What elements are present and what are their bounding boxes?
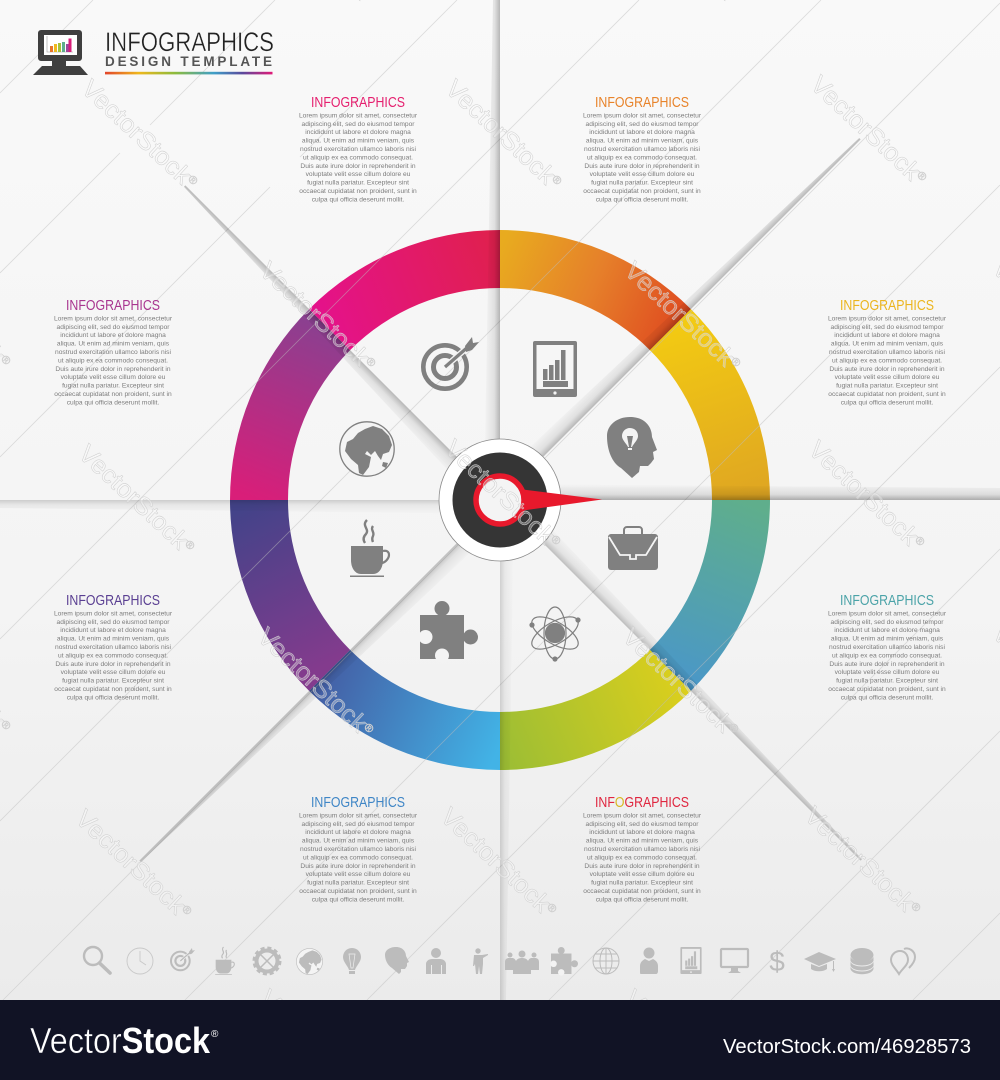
icon: head with lightbulb (607, 417, 657, 478)
icon: graduation cap (804, 952, 836, 972)
text block: left lower: culpa qui officia deserunt mollit. (67, 694, 159, 701)
text block: top left: ut aliquip ex ea commodo consequat. (303, 154, 413, 161)
text block: left lower: fugiat nulla pariatur. Excepteur sint (62, 678, 164, 685)
text block: bottom right: Lorem ipsum dolor sit amet, consectetur (583, 812, 702, 819)
text block: left upper: culpa qui officia deserunt mollit. (67, 399, 159, 406)
text block: top right: incididunt ut labore et dolore magna (589, 129, 695, 136)
text block: right lower: fugiat nulla pariatur. Excepteur sint (836, 678, 938, 685)
text block: left upper: aliqua. Ut enim ad minim veniam, quis (57, 341, 170, 348)
text block: right upper: incididunt ut labore et dolore magna (834, 332, 940, 339)
icon: map pins (891, 948, 915, 974)
text block: left lower: nostrud exercitation ullamco laboris nisi (55, 644, 171, 651)
text block: left upper: voluptate velit esse cillum dolore eu (61, 374, 166, 381)
watermarks: ® (544, 901, 559, 916)
bottom brand band: VectorStock.com/46928573 (723, 1036, 971, 1058)
text block: top right: Duis aute irure dolor in reprehenderit in (584, 163, 700, 170)
text block: left upper: occaecat cupidatat non proident, sunt in (54, 391, 172, 398)
icon: clock (127, 948, 153, 974)
text block: bottom right: ut aliquip ex ea commodo consequat. (587, 854, 697, 861)
text block: bottom right (583, 795, 702, 903)
text block: bottom right: INFOGRAPHICS (595, 795, 689, 811)
watermarks: VectorStock (803, 435, 919, 547)
icon: gear (254, 948, 280, 974)
text block: bottom left: aliqua. Ut enim ad minim veniam, quis (302, 838, 415, 845)
icon: person (640, 948, 658, 974)
watermarks: ® (914, 169, 929, 184)
text block: right upper: nostrud exercitation ullamco laboris nisi (829, 349, 945, 356)
icon: monitor (721, 949, 748, 973)
text block: bottom left: fugiat nulla pariatur. Excepteur sint (307, 880, 409, 887)
text block: bottom right: incididunt ut labore et dolore magna (589, 829, 695, 836)
watermarks: VectorStock (73, 439, 189, 551)
text block: top right: occaecat cupidatat non proident, sunt in (583, 188, 701, 195)
icon: team (505, 950, 539, 974)
watermarks: VectorStock (254, 256, 370, 368)
text block: top right: INFOGRAPHICS (595, 95, 689, 111)
icon: dollar: $ (769, 946, 785, 977)
text block: right upper: occaecat cupidatat non proident, sunt in (828, 391, 946, 398)
text block: right upper: culpa qui officia deserunt mollit. (841, 399, 933, 406)
watermarks: VectorStock (435, 802, 551, 914)
header: title (105, 27, 274, 74)
text block: left lower: Lorem ipsum dolor sit amet, consectetur (54, 610, 173, 617)
text block: right upper: Duis aute irure dolor in reprehenderit in (829, 366, 945, 373)
text block: bottom left: culpa qui officia deserunt mollit. (312, 896, 404, 903)
text block: right lower: Duis aute irure dolor in reprehenderit in (829, 661, 945, 668)
text block: top left: fugiat nulla pariatur. Excepteur sint (307, 180, 409, 187)
text block: right lower: voluptate velit esse cillum dolore eu (835, 669, 940, 676)
icon: businessman (426, 948, 446, 974)
text block: top right: voluptate velit esse cillum dolore eu (590, 171, 695, 178)
text block: top right: adipiscing elit, sed do eiusmod tempor (586, 121, 699, 128)
text block: right lower: adipiscing elit, sed do eiusmod tempor (831, 619, 944, 626)
icon: tablet chart (533, 341, 577, 397)
text block: bottom right: Duis aute irure dolor in reprehenderit in (584, 863, 700, 870)
icon: small target (171, 948, 195, 970)
text block: right lower: nostrud exercitation ullamco laboris nisi (829, 644, 945, 651)
watermarks: ® (182, 538, 197, 553)
watermarks: VectorStock (76, 74, 192, 186)
text block: bottom left (299, 795, 418, 903)
watermarks: VectorStock (252, 622, 368, 734)
bottom brand band (0, 1000, 1000, 1080)
text block: bottom left: incididunt ut labore et dolore magna (305, 829, 411, 836)
text block: right lower: occaecat cupidatat non proident, sunt in (828, 686, 946, 693)
text block: right upper: INFOGRAPHICS (840, 298, 934, 314)
text block: left upper: ut aliquip ex ea commodo consequat. (58, 357, 168, 364)
watermarks: VectorStock (70, 804, 186, 916)
watermarks: ® (728, 355, 743, 370)
center dial with red pointer (439, 434, 602, 561)
text block: top right: culpa qui officia deserunt mollit. (596, 196, 688, 203)
text block: bottom left: Duis aute irure dolor in reprehenderit in (300, 863, 416, 870)
bottom brand band: VectorStock (30, 1020, 211, 1061)
text block: top right: fugiat nulla pariatur. Excepteur sint (591, 180, 693, 187)
bottom icon row (84, 946, 915, 977)
text block: right lower: incididunt ut labore et dolore magna (834, 627, 940, 634)
text block: bottom left: occaecat cupidatat non proident, sunt in (299, 888, 417, 895)
watermarks: VectorStock (619, 256, 735, 368)
text block: left lower: voluptate velit esse cillum dolore eu (61, 669, 166, 676)
watermarks: ® (726, 721, 741, 736)
text block: left upper (54, 298, 173, 406)
text block: bottom right: fugiat nulla pariatur. Excepteur sint (591, 880, 693, 887)
header: computer logo icon (33, 30, 88, 75)
text block: left upper: Lorem ipsum dolor sit amet, consectetur (54, 315, 173, 322)
icon: bulb (343, 948, 361, 974)
watermarks: ® (549, 173, 564, 188)
text block: top left: voluptate velit esse cillum dolore eu (306, 171, 411, 178)
text block: right lower: aliqua. Ut enim ad minim veniam, quis (831, 636, 944, 643)
icon: coins (850, 948, 874, 974)
watermarks: ® (908, 900, 923, 915)
text block: top right: nostrud exercitation ullamco laboris nisi (584, 146, 700, 153)
watermarks: VectorStock (440, 74, 556, 186)
text block: top right (583, 95, 702, 203)
icon: puzzle piece (418, 601, 478, 662)
text block: right lower: ut aliquip ex ea commodo consequat. (832, 652, 942, 659)
text block: right upper: fugiat nulla pariatur. Excepteur sint (836, 383, 938, 390)
icon: coffee cup (350, 520, 389, 577)
icon: wire globe (593, 948, 619, 974)
text block: right lower: INFOGRAPHICS (840, 593, 934, 609)
watermarks: VectorStock (799, 801, 915, 913)
text block: left lower: adipiscing elit, sed do eiusmod tempor (57, 619, 170, 626)
text block: right lower (828, 593, 947, 701)
text block: top left: aliqua. Ut enim ad minim veniam, quis (302, 138, 415, 145)
text block: left upper: fugiat nulla pariatur. Excepteur sint (62, 383, 164, 390)
text block: bottom left: Lorem ipsum dolor sit amet, consectetur (299, 812, 418, 819)
text block: left upper: Duis aute irure dolor in reprehenderit in (55, 366, 171, 373)
text block: bottom right: adipiscing elit, sed do eiusmod tempor (586, 821, 699, 828)
text block: bottom right: occaecat cupidatat non proident, sunt in (583, 888, 701, 895)
text block: right upper: voluptate velit esse cillum dolore eu (835, 374, 940, 381)
icon: small head (385, 947, 409, 974)
text block: left lower: incididunt ut labore et dolore magna (60, 627, 166, 634)
text block: right lower: Lorem ipsum dolor sit amet, consectetur (828, 610, 947, 617)
text block: right upper: adipiscing elit, sed do eiusmod tempor (831, 324, 944, 331)
text block: right upper: aliqua. Ut enim ad minim veniam, quis (831, 341, 944, 348)
watermarks: ® (185, 173, 200, 188)
text block: top left: incididunt ut labore et dolore magna (305, 129, 411, 136)
text block: bottom left: voluptate velit esse cillum dolore eu (306, 871, 411, 878)
text block: left lower: ut aliquip ex ea commodo consequat. (58, 652, 168, 659)
text block: top left (299, 95, 418, 203)
text block: left lower: occaecat cupidatat non proident, sunt in (54, 686, 172, 693)
bottom brand band: ® (211, 1029, 219, 1040)
text block: right lower: culpa qui officia deserunt mollit. (841, 694, 933, 701)
watermarks: VectorStock (805, 70, 921, 182)
center dial with red pointer: ® (548, 533, 563, 548)
text block: right upper: ut aliquip ex ea commodo consequat. (832, 357, 942, 364)
text block: top left: INFOGRAPHICS (311, 95, 405, 111)
watermarks: ® (912, 534, 927, 549)
text block: left lower (54, 593, 173, 701)
text block: left upper: adipiscing elit, sed do eiusmod tempor (57, 324, 170, 331)
header: title: DESIGN TEMPLATE (105, 54, 272, 69)
icon: presenter (473, 948, 488, 974)
text block: left lower: Duis aute irure dolor in reprehenderit in (55, 661, 171, 668)
text block: left upper: INFOGRAPHICS (66, 298, 160, 314)
text block: bottom right: aliqua. Ut enim ad minim veniam, quis (586, 838, 699, 845)
text block: left upper: nostrud exercitation ullamco laboris nisi (55, 349, 171, 356)
text block: top right: aliqua. Ut enim ad minim veniam, quis (586, 138, 699, 145)
text block: bottom right: nostrud exercitation ullamco laboris nisi (584, 846, 700, 853)
text block: left upper: incididunt ut labore et dolore magna (60, 332, 166, 339)
icon: small globe (296, 948, 323, 975)
text block: top left: culpa qui officia deserunt mollit. (312, 196, 404, 203)
icon: magnifier (84, 947, 110, 973)
text block: top right: Lorem ipsum dolor sit amet, consectetur (583, 112, 702, 119)
text block: bottom left: nostrud exercitation ullamco laboris nisi (300, 846, 416, 853)
text block: top left: occaecat cupidatat non proident, sunt in (299, 188, 417, 195)
text block: right upper (828, 298, 947, 406)
text block: left lower: aliqua. Ut enim ad minim veniam, quis (57, 636, 170, 643)
text block: top left: nostrud exercitation ullamco laboris nisi (300, 146, 416, 153)
text block: top left: Duis aute irure dolor in reprehenderit in (300, 163, 416, 170)
icon: globe (340, 422, 394, 476)
text block: left lower: INFOGRAPHICS (66, 593, 160, 609)
text block: top left: adipiscing elit, sed do eiusmod tempor (302, 121, 415, 128)
icon: small tablet (680, 947, 702, 974)
text block: bottom left: INFOGRAPHICS (311, 795, 405, 811)
icon: target with arrow (423, 337, 479, 389)
text block: right upper: Lorem ipsum dolor sit amet, consectetur (828, 315, 947, 322)
text block: bottom left: ut aliquip ex ea commodo consequat. (303, 854, 413, 861)
text block: bottom right: culpa qui officia deserunt mollit. (596, 896, 688, 903)
header: title: INFOGRAPHICS (105, 27, 274, 57)
watermarks: ® (363, 355, 378, 370)
center dial with red pointer: VectorStock (439, 434, 555, 546)
text block: bottom right: voluptate velit esse cillum dolore eu (590, 871, 695, 878)
text block: top left: Lorem ipsum dolor sit amet, consectetur (299, 112, 418, 119)
watermarks: ® (179, 903, 194, 918)
icon: small cup (215, 947, 234, 975)
icon: atom (527, 607, 583, 661)
text block: bottom left: adipiscing elit, sed do eiusmod tempor (302, 821, 415, 828)
icon: briefcase (608, 527, 658, 570)
color ring (230, 230, 770, 770)
icon: small puzzle (550, 947, 578, 976)
watermarks: ® (361, 721, 376, 736)
watermarks: VectorStock (617, 622, 733, 734)
text block: top right: ut aliquip ex ea commodo consequat. (587, 154, 697, 161)
